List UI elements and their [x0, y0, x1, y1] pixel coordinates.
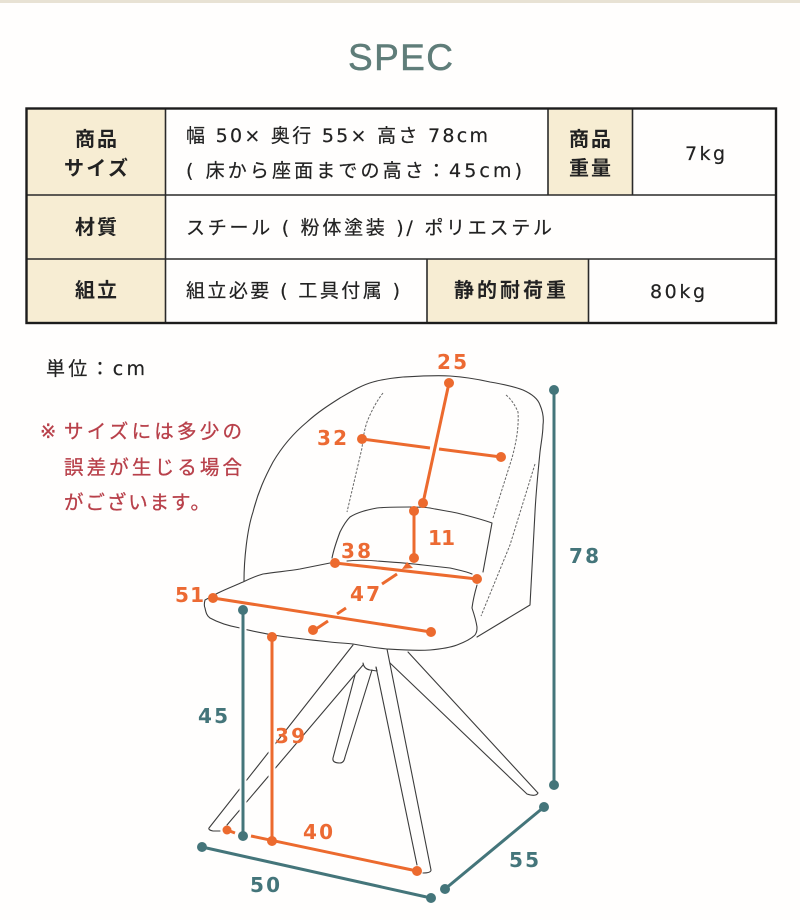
leg hub [363, 663, 377, 671]
seat front outline [204, 585, 477, 650]
row label: assembly: 組立 [75, 278, 117, 302]
seat top outline [218, 563, 330, 593]
dimension 50 [197, 842, 436, 903]
dimension 11 [409, 506, 455, 563]
table grid [26, 108, 776, 323]
top bar [0, 0, 800, 3]
orange dimension lines [175, 350, 506, 876]
size tolerance note: ※ [40, 420, 56, 443]
size value [186, 125, 522, 182]
chair line drawing [204, 376, 543, 873]
size tolerance note: がございます。 [64, 491, 210, 514]
dimension 51: 51 [175, 583, 204, 607]
row label: product size [64, 127, 128, 180]
unit label: 単位：cm [46, 358, 145, 380]
white gaps under lines [243, 620, 272, 832]
dimension 11: 11 [428, 526, 455, 550]
assembly value: 組立必要 ( 工具付属 ) [186, 280, 400, 302]
dimension 39: 39 [275, 724, 305, 748]
title: SPEC [348, 37, 453, 78]
row label: product size: サイズ [64, 156, 128, 180]
weight value: 7kg [685, 143, 725, 165]
stitching [347, 393, 383, 512]
table cell backgrounds [27, 109, 632, 322]
front leg [376, 649, 431, 873]
dimension 25 [418, 350, 467, 508]
size tolerance note: 誤差が生じる場合 [64, 456, 242, 479]
right leg [390, 652, 538, 795]
row label: product weight: 商品 [569, 127, 611, 151]
cushion bottom seam [347, 560, 472, 574]
size tolerance note [40, 420, 242, 514]
left leg [209, 645, 363, 831]
size value: ( 床から座面までの高さ：45cm) [186, 160, 522, 182]
row label: product weight [569, 127, 611, 180]
back leg [333, 670, 372, 763]
dimension 51 [175, 583, 436, 637]
dimension 78: 78 [569, 544, 599, 568]
dimension 40 [222, 820, 422, 876]
dimension 32 [317, 426, 506, 462]
row label: product weight: 重量 [569, 156, 611, 180]
row label: material: 材質 [75, 215, 117, 239]
dimension 40: 40 [303, 820, 333, 844]
row label: product size: 商品 [75, 127, 117, 151]
dimension 55 [440, 802, 549, 894]
dimension 50: 50 [250, 873, 280, 897]
dimension 47: 47 [350, 582, 380, 606]
dimension 25: 25 [437, 350, 467, 374]
dimension 78 [549, 385, 599, 790]
dimension 45: 45 [198, 704, 228, 728]
dimension 38 [330, 539, 482, 584]
dimension 55: 55 [509, 848, 539, 872]
material value: スチール ( 粉体塗装 )/ ポリエステル [186, 217, 552, 239]
load value: 80kg [650, 281, 705, 303]
dimension 32: 32 [317, 426, 347, 450]
spec table [26, 108, 776, 323]
dimension 45 [198, 605, 248, 841]
teal dimension lines [197, 385, 599, 903]
dimension 38: 38 [341, 539, 371, 563]
dimension 39 [267, 632, 305, 846]
size value: 幅 50× 奥行 55× 高さ 78cm [186, 125, 488, 147]
dimension 47 [308, 562, 413, 635]
row label: static load: 静的耐荷重 [454, 278, 566, 302]
back cushion outline [332, 507, 492, 572]
size tolerance note: サイズには多少の [64, 420, 242, 443]
chair back outline [244, 376, 543, 637]
